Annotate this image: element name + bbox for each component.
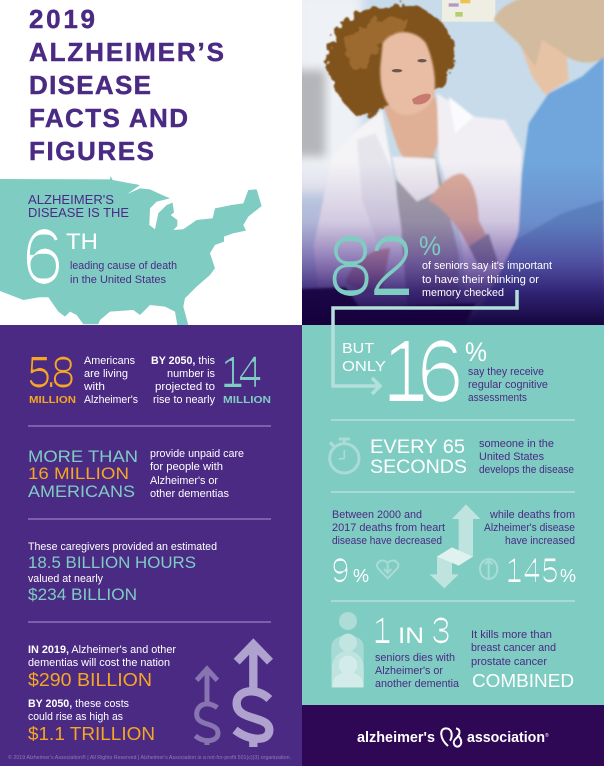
stat: 82 percent of seniors: of seniors say it's important (422, 260, 552, 272)
stat: 16 million unpaid caregivers: other dementias (150, 488, 229, 500)
stat: 1 in 3 seniors: another dementia (375, 678, 460, 690)
stat: heart disease deaths decreased: % (353, 566, 369, 586)
title: 2019 (29, 4, 95, 34)
map heading (28, 193, 129, 220)
icon: small dollar with up arrow (195, 669, 218, 745)
stat: caregiver hours and value: 18.5 BILLION HOURS (28, 554, 196, 572)
title: ALZHEIMER’S (29, 37, 224, 67)
map caption: in the United States (70, 274, 166, 286)
big number 6th (21, 212, 98, 300)
stat: 1 in 3 seniors: 3 (431, 610, 451, 651)
stat: but only 16 percent: ONLY (342, 358, 386, 375)
copyright line: © 2019 Alzheimer's Association® | All Rights Reserved | Alzheimer's Association is a not-for-profit 501(c)(3) organization. (8, 754, 291, 761)
stat: 16 million unpaid caregivers: AMERICANS (28, 483, 135, 501)
stat: 5.8 million: MILLION (29, 394, 76, 406)
stat: 14 million by 2050 (151, 348, 271, 406)
stat: cost of dementia (28, 644, 176, 744)
icon: brain with up arrow (480, 559, 497, 579)
stat: heart disease deaths decreased: Between 2000 and (332, 509, 422, 521)
panel: teal statistics background (302, 325, 604, 705)
stat: 1 in 3 seniors: 1 (372, 610, 392, 651)
panel: sixth leading cause map (0, 176, 262, 325)
stat: cost of dementia: IN 2019, Alzheimer's and other (28, 644, 176, 656)
arrow: connector from 82 percent to 16 percent (333, 290, 517, 394)
stat: 5.8 million: are living (84, 368, 128, 380)
panel: purple statistics background (0, 325, 302, 766)
stat: but only 16 percent: regular cognitive (468, 379, 548, 391)
stat: 1 in 3 seniors (372, 610, 460, 690)
stat: every 65 seconds: United States (479, 451, 544, 463)
map heading: DISEASE IS THE (28, 206, 129, 220)
stat: but only 16 percent: 16 (381, 323, 464, 420)
stat: every 65 seconds: SECONDS (370, 457, 467, 478)
stat: every 65 seconds: someone in the (479, 438, 554, 450)
icon: logo symbol (441, 728, 461, 747)
icon: stopwatch (330, 439, 359, 473)
stat: 1 in 3 seniors: Alzheimer's or (375, 665, 443, 677)
stat: 16 million unpaid caregivers: MORE THAN (28, 448, 138, 466)
title (29, 4, 224, 166)
stat: 82 percent of seniors (327, 219, 552, 314)
stat: heart disease deaths decreased: 9 (331, 552, 350, 590)
stat: 82 percent of seniors: % (419, 231, 441, 261)
map of the United States (0, 176, 262, 325)
logo: alzheimer's association: alzheimer's (357, 729, 435, 746)
stat: but only 16 percent: BUT (342, 340, 374, 357)
stat: but only 16 percent: say they receive (468, 366, 544, 378)
stat: caregiver hours and value: These caregivers provided an estimated (28, 541, 217, 553)
stat: every 65 seconds (370, 437, 574, 478)
stat: cost of dementia: BY 2050, these costs (28, 698, 129, 710)
stat: alzheimer's deaths increased: have increased (505, 535, 575, 547)
map caption: leading cause of death (70, 260, 177, 272)
stat: 82 percent of seniors: to have their thinking or (422, 274, 539, 286)
map heading: ALZHEIMER'S (28, 193, 114, 207)
stat: alzheimer's deaths increased: Alzheimer's disease (484, 522, 575, 534)
icon: heart with down arrow (377, 561, 398, 578)
stat: kills more than cancers combined: It kills more than (471, 629, 552, 641)
stat: 14 million by 2050: BY 2050, this (151, 355, 215, 367)
logo: alzheimer's association (357, 728, 549, 747)
stat: 14 million by 2050: MILLION (223, 394, 271, 406)
stat: alzheimer's deaths increased: % (560, 566, 576, 586)
icon: three people (331, 612, 364, 687)
stat: kills more than cancers combined: COMBINED (472, 671, 574, 691)
stat: 1 in 3 seniors: seniors dies with (375, 652, 455, 664)
stat: 5.8 million: Alzheimer's (84, 394, 138, 406)
stat: 5.8 million (27, 348, 138, 406)
stat: 14 million by 2050: number is (167, 368, 215, 380)
stat: 82 percent of seniors: 82 (327, 219, 415, 314)
photo: doctor talking with senior patient (292, 0, 604, 330)
footer band (302, 705, 604, 766)
stat: heart disease deaths decreased: disease have decreased (332, 535, 442, 547)
stat: but only 16 percent: % (465, 337, 487, 367)
title: FIGURES (29, 136, 154, 166)
stat: cost of dementia: $290 BILLION (28, 670, 152, 690)
title: DISEASE (29, 70, 151, 100)
stat: kills more than cancers combined: prostate cancer (471, 656, 547, 668)
big number 6th: TH (66, 229, 98, 254)
stat: caregiver hours and value: valued at nearly (28, 573, 103, 585)
title: FACTS AND (29, 103, 188, 133)
stat: 1 in 3 seniors: IN (398, 623, 424, 648)
stat: but only 16 percent: assessments (468, 392, 527, 404)
stat: every 65 seconds: develops the disease (479, 464, 574, 476)
big number 6th: 6 (21, 212, 64, 300)
stat: alzheimer's deaths increased (484, 509, 576, 590)
arrows: up and down crossing (430, 504, 480, 588)
stat: 14 million by 2050: projected to (155, 381, 215, 393)
stat: kills more than cancers combined (471, 629, 574, 691)
map caption (70, 260, 177, 286)
stat: 82 percent of seniors: memory checked (422, 287, 504, 299)
stat: alzheimer's deaths increased: while deaths from (489, 509, 575, 521)
stat: cost of dementia: could rise as high as (28, 711, 123, 723)
stat: 14 million by 2050: 14 (220, 348, 262, 397)
stat: 16 million unpaid caregivers (28, 448, 244, 501)
stat: 16 million unpaid caregivers: 16 MILLION (28, 465, 129, 483)
logo: alzheimer's association: ® (545, 732, 549, 739)
icon: large dollar with up arrow (235, 644, 270, 747)
stat: 5.8 million: with (83, 381, 105, 393)
stat: 16 million unpaid caregivers: Alzheimer's or (150, 475, 218, 487)
stat: every 65 seconds: EVERY 65 (370, 437, 465, 458)
stat: heart disease deaths decreased: 2017 deaths from heart (332, 522, 445, 534)
stat: kills more than cancers combined: breast cancer and (471, 642, 556, 654)
stat: caregiver hours and value (28, 541, 217, 604)
stat: caregiver hours and value: $234 BILLION (28, 586, 137, 604)
stat: 5.8 million: 5.8 (27, 348, 75, 397)
stat: 14 million by 2050: rise to nearly (153, 394, 215, 406)
stat: 16 million unpaid caregivers: provide unpaid care (150, 448, 244, 460)
stat: but only 16 percent (342, 323, 548, 420)
stat: heart disease deaths decreased (331, 509, 445, 590)
stat: cost of dementia: $1.1 TRILLION (28, 724, 155, 744)
stat: cost of dementia: dementias will cost the nation (28, 657, 170, 669)
stat: 16 million unpaid caregivers: for people with (150, 461, 223, 473)
stat: alzheimer's deaths increased: 145 (505, 552, 559, 590)
stat: 5.8 million: Americans (84, 355, 135, 367)
logo: alzheimer's association: association (467, 729, 545, 746)
